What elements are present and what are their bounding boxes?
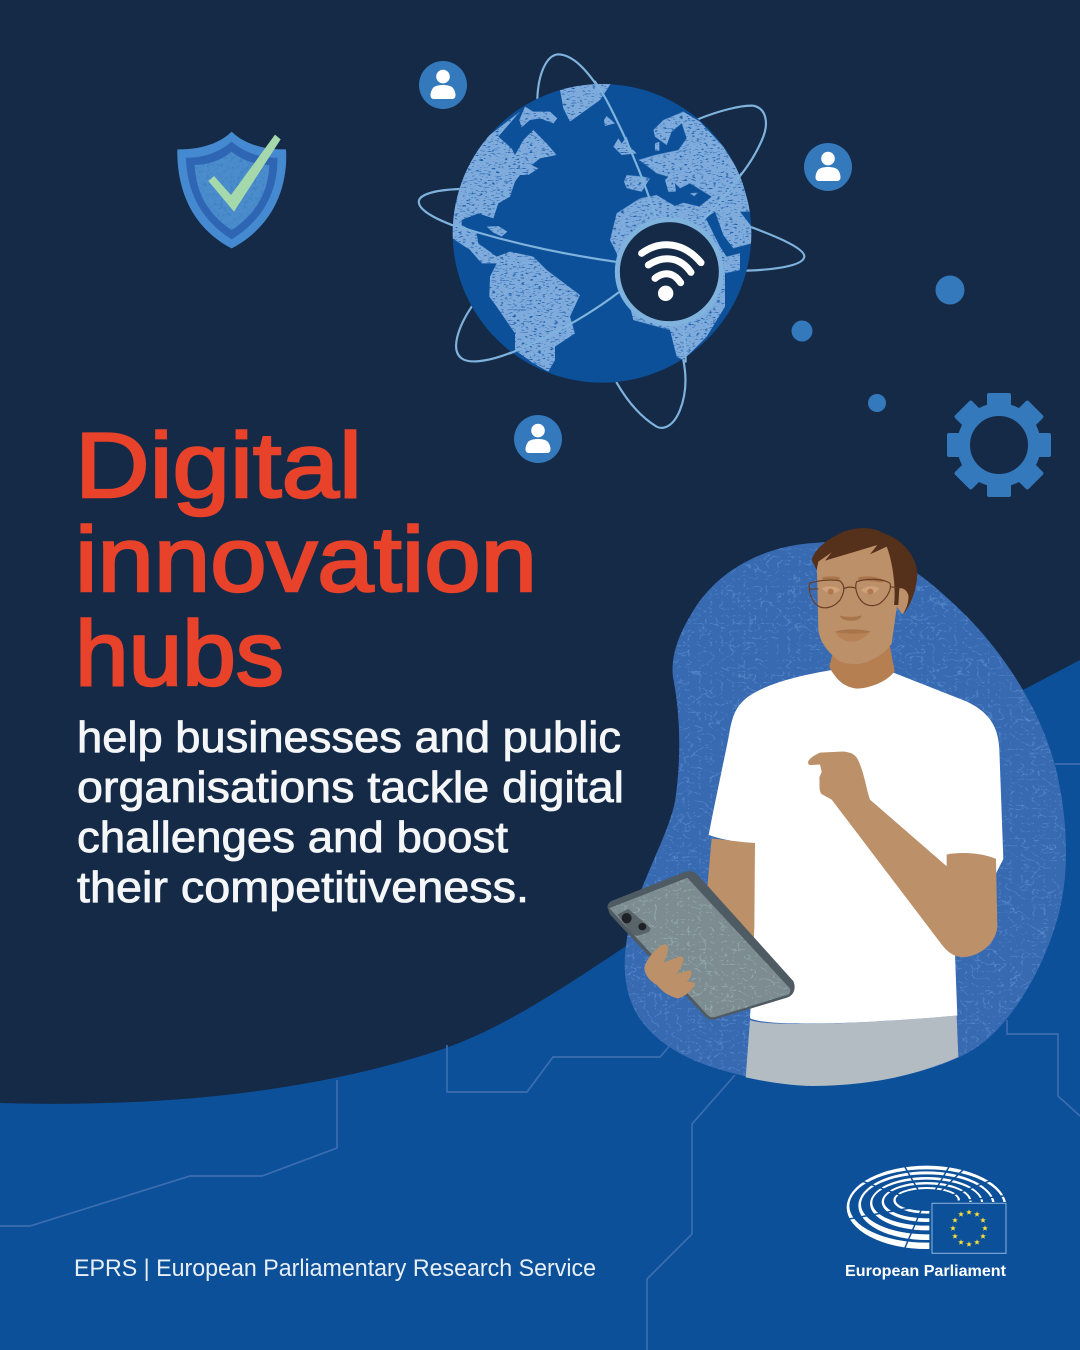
title: Digital (75, 415, 362, 517)
nose (839, 615, 862, 621)
tablet (607, 871, 795, 1020)
background: blue wave (0, 660, 1080, 1350)
eyes (822, 586, 840, 593)
orbit: rear segments (419, 54, 804, 428)
subtitle text block: organisations tackle digital (77, 763, 624, 812)
hand holding tablet (644, 944, 695, 999)
icon: security shield with check mark (177, 132, 286, 248)
subtitle text block: challenges and boost (77, 813, 508, 862)
illustration: man holding tablet on textured blob (607, 528, 1066, 1086)
icon: user 1 (419, 61, 467, 109)
logo: EU flag (932, 1203, 1006, 1253)
title: hubs (75, 603, 284, 705)
circuit lines (0, 764, 1080, 1350)
head (809, 528, 917, 689)
title (75, 415, 537, 705)
title: innovation (75, 509, 537, 611)
logo: hemicycle (846, 1166, 1006, 1249)
logo: European Parliament (846, 1166, 1007, 1280)
icon: gear (947, 393, 1051, 497)
glasses (809, 579, 897, 608)
subtitle text block: their competitiveness. (77, 863, 529, 912)
left arm (707, 839, 755, 942)
trousers (746, 1016, 958, 1086)
neck (829, 647, 895, 689)
hair (812, 528, 917, 614)
textured blob (625, 542, 1066, 1086)
subtitle text block (77, 713, 624, 912)
footer source text: EPRS | European Parliamentary Research Service (74, 1255, 596, 1282)
eyebrows (822, 576, 840, 581)
raised forearm and pointing hand (808, 751, 997, 957)
globe with orbits and wifi (419, 54, 804, 428)
globe sphere (453, 84, 751, 383)
wifi badge (617, 220, 721, 324)
subtitle text block: help businesses and public (77, 713, 621, 762)
continents (450, 80, 757, 372)
ear (895, 588, 909, 614)
mouth (835, 632, 871, 642)
icon: user 3 (514, 415, 562, 463)
white t-shirt (709, 670, 1003, 1024)
face (817, 540, 897, 664)
icon: user 2 (804, 143, 852, 191)
logo: European Parliament: European Parliament (845, 1263, 1007, 1280)
decorative dots (792, 276, 964, 412)
orbit: front segments (453, 82, 742, 362)
